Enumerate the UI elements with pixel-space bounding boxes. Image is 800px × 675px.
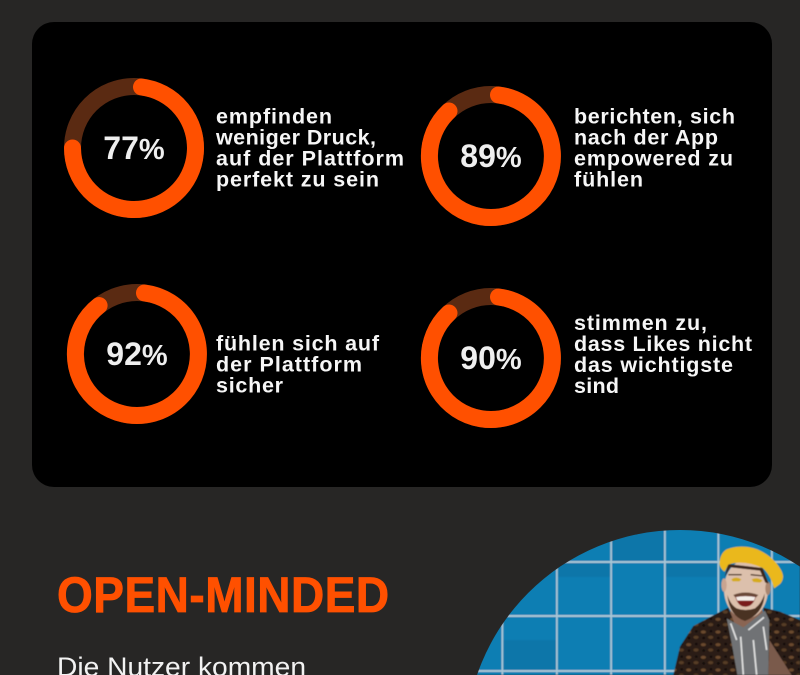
label: 77%: perfekt zu sein bbox=[216, 168, 379, 192]
label: 90%: sind bbox=[574, 374, 619, 398]
donut stat: 77% bbox=[72, 86, 196, 210]
label: 90%: stimmen zu, bbox=[574, 311, 707, 335]
label: 77%: auf der Plattform bbox=[216, 146, 404, 170]
label: 89% bbox=[574, 104, 735, 192]
neck bbox=[729, 609, 764, 628]
label: 92%: der Plattform bbox=[216, 352, 362, 376]
beard bbox=[727, 593, 765, 621]
label: 90%: dass Likes nicht bbox=[574, 332, 752, 356]
label: 92%: fühlen sich auf bbox=[216, 332, 380, 356]
label: 92% bbox=[216, 332, 380, 398]
inner coat lining bbox=[768, 640, 792, 675]
eyes and yellow shadow bbox=[731, 578, 741, 581]
panel: survey statistics bbox=[32, 22, 772, 487]
fur coat bbox=[673, 608, 743, 675]
yellow beret bbox=[719, 547, 783, 588]
label: 90% bbox=[574, 311, 752, 398]
donut stat: 90%: 90% bbox=[460, 340, 522, 376]
label: 77%: weniger Druck, bbox=[215, 126, 376, 150]
donut stat: 92%: 92% bbox=[106, 336, 168, 372]
mouth bbox=[735, 596, 756, 607]
donut stat: 89% bbox=[429, 94, 552, 218]
donut stat: 92% bbox=[75, 292, 198, 416]
label: 92%: sicher bbox=[216, 374, 284, 398]
face bbox=[724, 560, 768, 619]
striped shirt bbox=[727, 611, 769, 675]
donut stat: 89%: 89% bbox=[460, 138, 522, 174]
donut stat: 90% bbox=[429, 296, 552, 420]
label: 89%: nach der App bbox=[574, 126, 718, 150]
label: 77%: empfinden bbox=[216, 104, 332, 128]
label: 77% bbox=[215, 104, 404, 192]
donut stat: 77%: 77% bbox=[103, 130, 165, 166]
hair under beret bbox=[725, 564, 769, 583]
label: 90%: das wichtigste bbox=[574, 353, 733, 377]
label: 89%: empowered zu bbox=[574, 146, 733, 170]
label: 89%: fühlen bbox=[574, 168, 643, 192]
heading: OPEN-MINDED: OPEN-MINDED bbox=[57, 568, 389, 623]
photo: man with yellow beret against blue tiles bbox=[477, 530, 800, 675]
label: 89%: berichten, sich bbox=[574, 104, 735, 128]
